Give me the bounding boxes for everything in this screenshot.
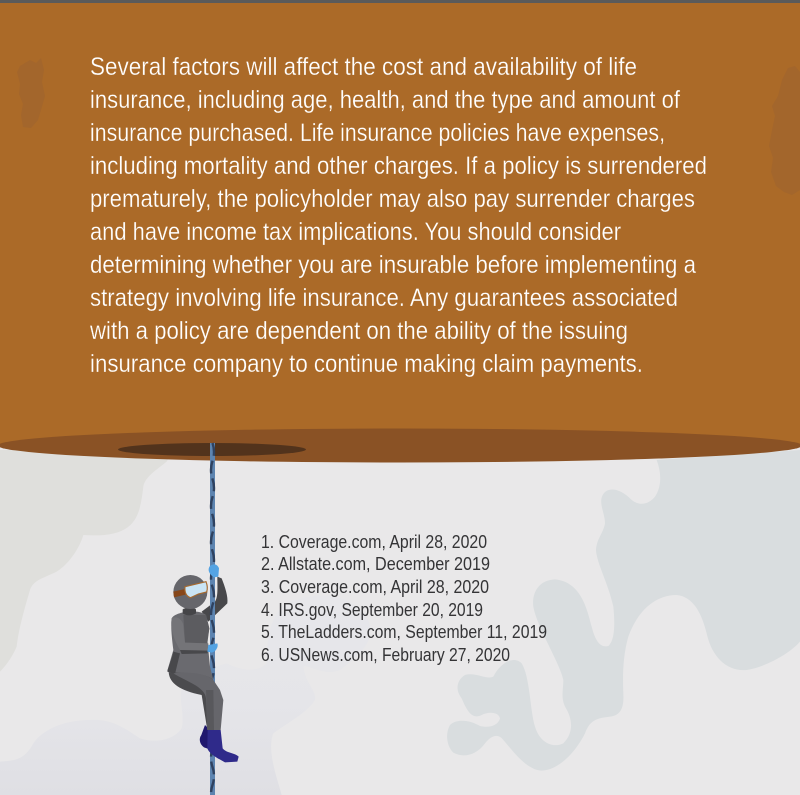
collar [183, 608, 196, 615]
source list: 5. TheLadders.com, September 11, 2019 [261, 622, 547, 642]
rope [211, 443, 214, 795]
source list: 3. Coverage.com, April 28, 2020 [261, 577, 489, 597]
torso shadow [183, 615, 209, 643]
background camouflage shapes [0, 440, 800, 795]
source list: 2. Allstate.com, December 2019 [261, 554, 490, 574]
overhang ellipse [0, 428, 800, 462]
source list: 6. USNews.com, February 27, 2020 [261, 645, 510, 665]
front leg [173, 673, 223, 730]
source list: 1. Coverage.com, April 28, 2020 [261, 532, 487, 552]
introductory paragraph: and have income tax implications. You should consider [90, 218, 621, 246]
climber figure on rope [167, 564, 239, 762]
lower glove [207, 643, 218, 653]
back thigh [169, 672, 213, 730]
introductory paragraph: insurance, including age, health, and the type and amount of [90, 86, 680, 114]
introductory paragraph: Several factors will affect the cost and availability of life [90, 53, 637, 81]
source list: 4. IRS.gov, September 20, 2019 [261, 600, 483, 620]
climber back arm [202, 577, 228, 622]
introductory paragraph: prematurely, the policyholder may also pay surrender charges [90, 185, 695, 213]
head [173, 575, 207, 609]
introductory paragraph [89, 53, 707, 378]
upper glove [209, 564, 219, 577]
torso [167, 611, 213, 680]
introductory paragraph: including mortality and other charges. If a policy is surrendered [90, 152, 707, 180]
introductory paragraph: determining whether you are insurable before implementing a [90, 251, 696, 279]
introductory paragraph: strategy involving life insurance. Any guarantees associated [90, 284, 678, 312]
introductory paragraph: insurance purchased. Life insurance policies have expenses, [90, 119, 665, 147]
goggle strap [173, 589, 186, 597]
goggles [185, 582, 207, 598]
top banner [0, 0, 800, 446]
rear boot [200, 725, 212, 750]
introductory paragraph: insurance company to continue making claim payments. [90, 350, 643, 378]
introductory paragraph: with a policy are dependent on the ability of the issuing [89, 317, 628, 345]
source list [261, 532, 547, 665]
front boot [207, 730, 239, 762]
hole in overhang [118, 443, 306, 456]
front arm [171, 617, 208, 651]
